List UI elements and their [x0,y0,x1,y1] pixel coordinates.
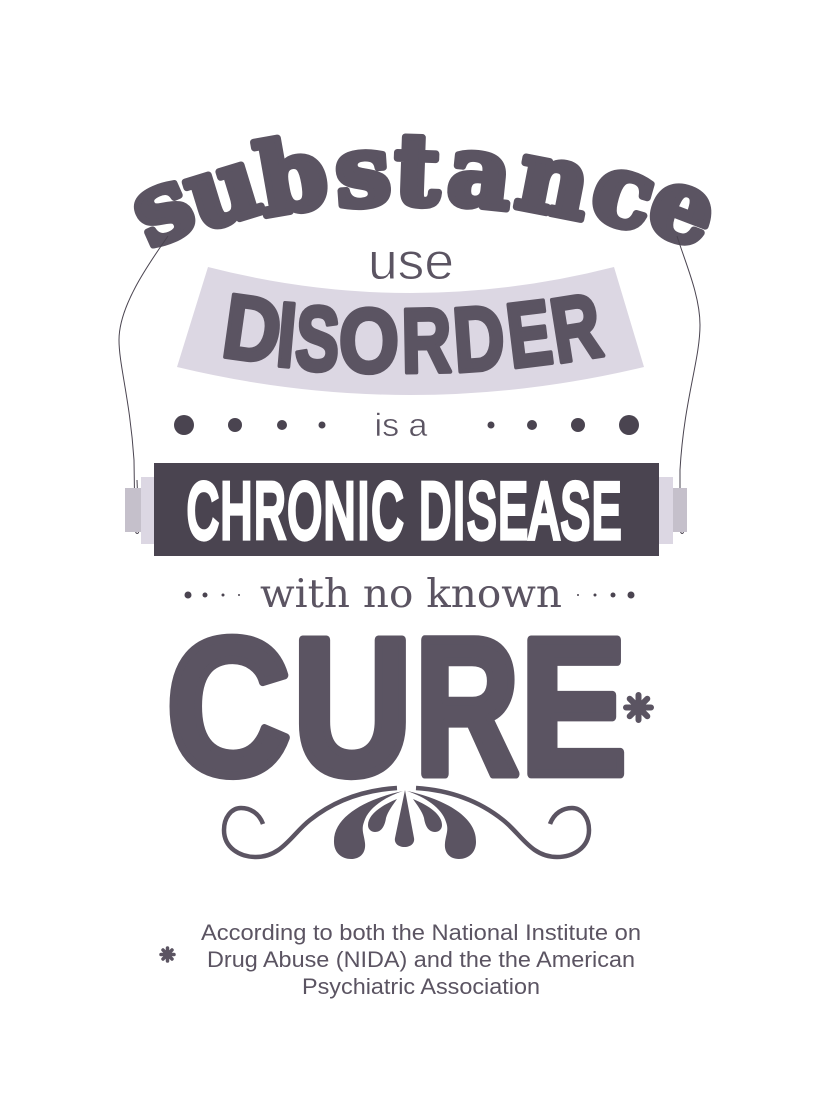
heading word: substance: a [443,112,518,233]
word: CURE: U [293,598,412,816]
heading word: substance: c [580,128,669,255]
small dots: right [577,592,634,598]
word: DISORDER: S [293,286,342,391]
heading word: substance: u [171,124,273,254]
icon: asterisk [626,695,651,720]
curved banner [177,267,644,395]
word: DISORDER: D [217,276,288,384]
footnote text: Psychiatric Association [302,974,540,999]
heading word: substance: s [113,143,210,270]
word: DISORDER: D [450,287,508,392]
small dots: left [184,592,240,598]
heading word: substance: e [634,142,734,272]
heading word: substance: b [248,114,336,240]
footnote text [201,920,641,999]
icon: footnote asterisk [161,948,174,961]
hanging string: left [119,236,168,534]
ribbon outer tails [125,488,687,532]
heading word: substance: n [508,117,600,243]
word: DISORDER: O [339,290,399,391]
word: CURE: C [166,598,291,816]
heading word: substance [113,112,734,272]
word: CURE [166,598,627,816]
ornament: flourish [224,788,589,859]
footnote text: According to both the National Institute on [201,920,641,945]
word: CURE: R [415,599,519,816]
word: CURE: E [520,598,627,816]
heading word: substance: t [393,112,442,229]
dotted divider: right [488,415,639,435]
words: is a: is a [374,407,428,443]
heading word: substance: s [331,112,394,231]
dark banner with CHRONIC DISEASE: CHRONIC DISEASE [187,468,621,555]
word: DISORDER [217,274,608,393]
word: DISORDER: R [401,291,452,393]
hanging string: right [677,236,700,534]
dotted divider: left [174,415,326,435]
ribbon inner tails [141,477,673,544]
word: DISORDER: E [501,280,557,387]
word: use: use [368,233,454,291]
words: with no known: with no known [260,572,562,617]
word: DISORDER: I [273,283,300,386]
footnote text: Drug Abuse (NIDA) and the the American [207,947,635,972]
word: DISORDER: R [544,274,608,382]
